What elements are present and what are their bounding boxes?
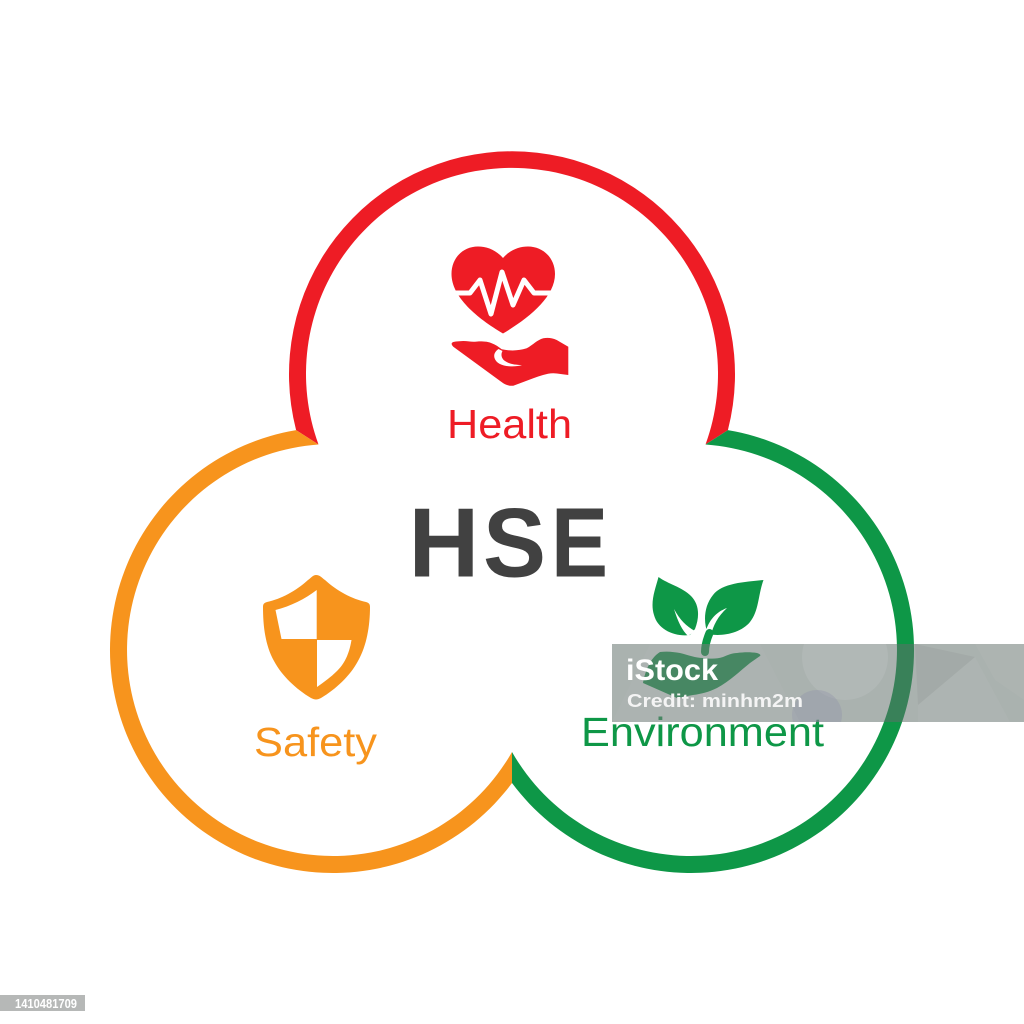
title: HSE: E	[551, 488, 608, 598]
label: Environment: Environment	[581, 709, 825, 755]
title: HSE	[408, 488, 608, 598]
label: Safety: Safety	[254, 719, 378, 765]
icon: shield	[263, 575, 370, 700]
panel: safety circle outline	[110, 430, 512, 873]
icon: heart with pulse	[450, 246, 556, 334]
watermark credit: Credit: minhm2m	[627, 691, 803, 711]
watermark logo: iStock: iStock	[626, 654, 718, 687]
label: Health: Health	[447, 401, 572, 447]
panel: health circle outline	[289, 151, 735, 444]
title: HSE: S	[483, 488, 546, 598]
panel: environment circle outline	[512, 430, 914, 873]
watermark band	[612, 644, 1024, 722]
icon: plant in hand	[643, 577, 764, 698]
title: HSE: H	[408, 488, 479, 598]
icon: open hand	[452, 338, 568, 386]
image id tag: 1410481709	[15, 997, 77, 1011]
